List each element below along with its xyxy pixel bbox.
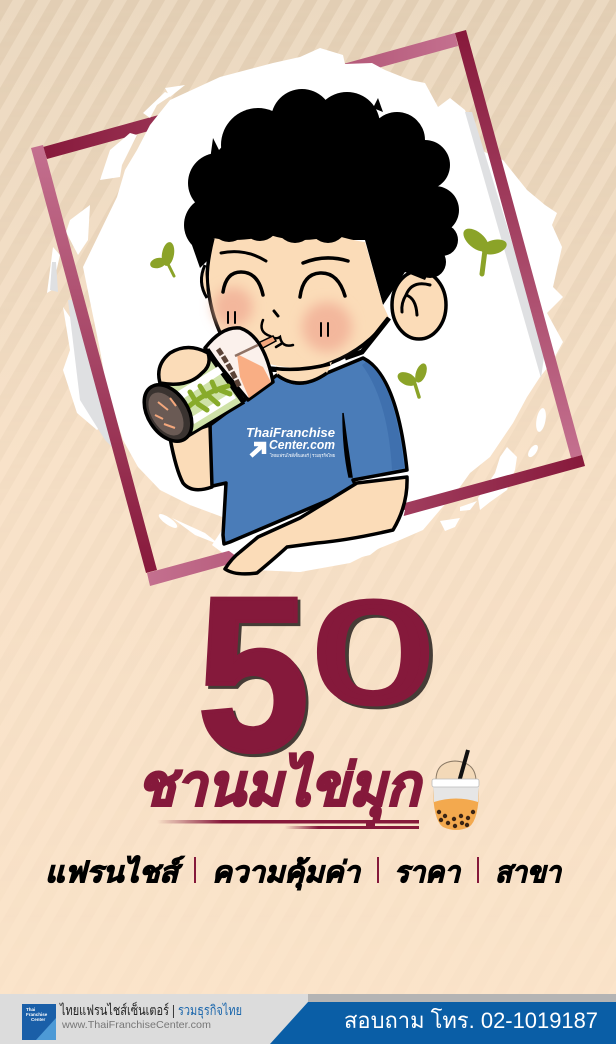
subtitle row: สาขา bbox=[495, 857, 563, 889]
subtitle row: แฟรนไชส์ bbox=[45, 855, 185, 889]
footer brand text bbox=[59, 1001, 242, 1031]
eyes and brows bbox=[221, 252, 348, 347]
footer logo: Franchise bbox=[26, 1012, 48, 1017]
footer bar bbox=[0, 994, 616, 1044]
heading number 50: 5 bbox=[200, 554, 312, 800]
footer logo: Thai bbox=[26, 1007, 35, 1012]
sprouts bbox=[149, 224, 508, 397]
shirt bbox=[208, 358, 407, 544]
white brush flecks bbox=[47, 85, 548, 545]
scalloped fringe bbox=[211, 203, 371, 243]
shirt logo: Center.com bbox=[269, 437, 335, 452]
title: ชานมไข่มุก bbox=[137, 752, 423, 822]
icon: bubble tea cup bbox=[432, 750, 479, 830]
footer contact panel: สอบถาม โทร. 02-1019187 bbox=[344, 1008, 598, 1033]
footer contact panel bbox=[270, 1002, 616, 1044]
icon: lower sprout bbox=[395, 362, 429, 397]
footer logo: Center bbox=[31, 1017, 46, 1022]
heading number 50: 0 bbox=[317, 575, 437, 736]
thumb bbox=[159, 348, 209, 384]
icon: right sprout bbox=[459, 224, 508, 274]
bubble tea in hand bbox=[134, 328, 276, 450]
title underline bbox=[157, 820, 419, 829]
heading number 50: 5 bbox=[197, 551, 310, 797]
brush overlap at bottom frame bbox=[225, 505, 405, 572]
icon: left sprout bbox=[149, 241, 176, 276]
cheeks bbox=[213, 287, 253, 327]
subtitle row: ความคุ้มค่า bbox=[212, 857, 362, 891]
shirt logo bbox=[246, 425, 335, 459]
cup dome bbox=[205, 328, 273, 400]
frame: left, right and bottom edges bbox=[31, 30, 585, 586]
frame: top edge behind brush bbox=[43, 33, 458, 159]
heading number 50: 0 bbox=[313, 572, 433, 733]
subtitle row bbox=[45, 855, 563, 891]
footer logo bbox=[22, 1004, 56, 1040]
ear bbox=[392, 271, 446, 339]
small side ear bbox=[201, 265, 207, 298]
cup base bbox=[134, 376, 202, 450]
footer brand text: www.ThaiFranchiseCenter.com bbox=[61, 1019, 211, 1031]
hair bbox=[184, 89, 459, 305]
shirt logo: ไทยแฟรนไชส์เซ็นเตอร์ | รวมธุรกิจไทย bbox=[269, 451, 335, 459]
grey shadow strips bbox=[50, 112, 545, 450]
neck bbox=[270, 362, 332, 383]
face bbox=[207, 203, 389, 370]
forearm bbox=[170, 425, 212, 490]
white brush blob bbox=[47, 48, 563, 572]
shirt logo: ThaiFranchise bbox=[246, 425, 335, 440]
heading number 50 bbox=[197, 551, 437, 800]
subtitle row: ราคา bbox=[394, 857, 462, 889]
background with diagonal stripes bbox=[0, 0, 616, 455]
lower arm bbox=[225, 477, 407, 574]
footer brand text: ไทยแฟรนไชส์เซ็นเตอร์ | รวมธุรกิจไทย bbox=[59, 1001, 242, 1019]
character bbox=[134, 89, 459, 574]
